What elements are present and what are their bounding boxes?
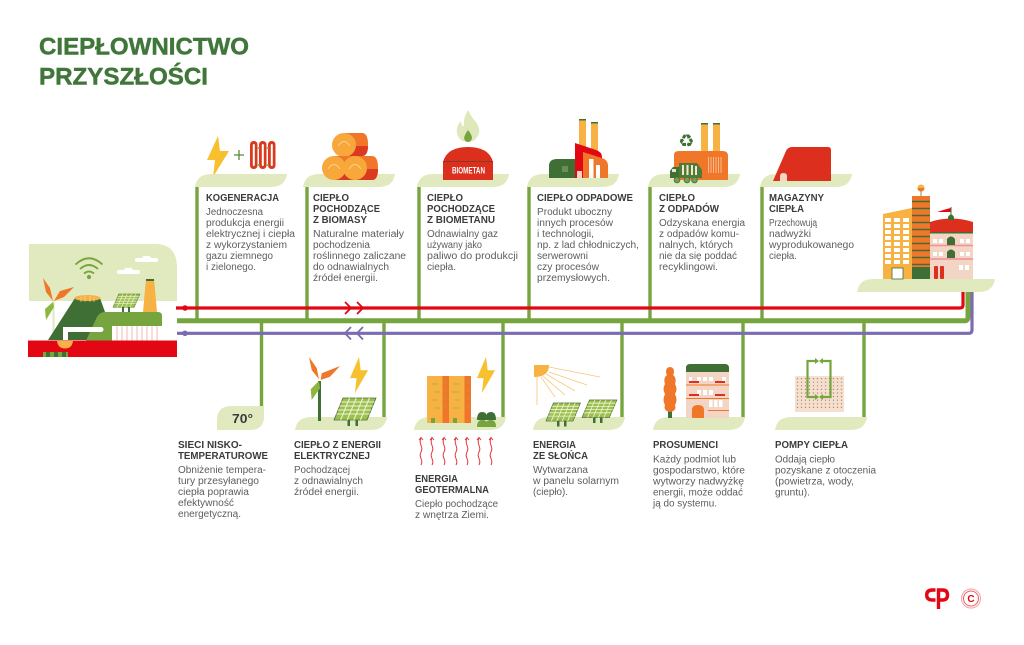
panel: pompy ciepła: POMPY CIEPŁA	[775, 440, 848, 451]
panel: sieci niskotemperaturowe: SIECI NISKO-	[178, 440, 242, 451]
panel: energia geotermalna: GEOTERMALNA	[415, 485, 489, 496]
icon: waste plant: ♻	[678, 131, 695, 152]
panel: ciepło odpadowe: serwerowni	[537, 251, 588, 262]
panel: biomasa: roślinnego zaliczane	[313, 251, 406, 262]
panel: prosumenci: PROSUMENCI	[653, 440, 718, 451]
panel: biomasa: pochodzenia	[313, 240, 370, 251]
panel: energia geotermalna	[414, 357, 506, 521]
panel: prosumenci: gospodarstwo, które	[653, 466, 745, 476]
panel: ciepło z odpadów: Z ODPADÓW	[659, 202, 720, 215]
panel: ciepło odpadowe: Produkt uboczny	[537, 207, 612, 218]
network pipelines	[176, 187, 972, 418]
panel: biomasa: do odnawialnych	[313, 262, 389, 273]
panel: magazyny ciepła: Przechowują	[769, 218, 817, 229]
icon: radiator	[250, 141, 276, 169]
panel: biomasa: Naturalne materiały	[313, 229, 404, 240]
panel: pompy ciepła	[775, 358, 876, 498]
panel: energia ze słońca: ENERGIA	[533, 440, 576, 451]
panel: pompy ciepła: pozyskane z otoczenia	[775, 466, 876, 476]
panel: biometan: paliwo do produkcji	[427, 251, 518, 262]
illustration: heat plant	[28, 244, 177, 357]
panel: sieci niskotemperaturowe: 70°	[232, 412, 253, 426]
icon: wind turbine	[309, 357, 340, 421]
panel: kogeneracja	[195, 136, 295, 273]
panel: ciepło odpadowe	[527, 119, 639, 284]
panel: magazyny ciepła	[760, 147, 854, 262]
panel: sieci niskotemperaturowe: TEMPERATUROWE	[178, 451, 268, 462]
icon: geothermal block	[427, 376, 471, 423]
panel: prosumenci: Każdy podmiot lub	[653, 454, 736, 466]
illustration: city buildings	[857, 184, 995, 292]
icon: flame	[457, 110, 479, 142]
panel: energia geotermalna: ENERGIA	[415, 474, 458, 485]
panel: prosumenci: ją do systemu.	[652, 498, 717, 510]
panel: kogeneracja: Jednoczesna	[206, 207, 263, 218]
panel: sieci niskotemperaturowe: Obniżenie tempera-	[178, 465, 266, 476]
panel: sieci niskotemperaturowe: efektywność	[178, 498, 234, 509]
panel: biomasa: CIEPŁO	[313, 193, 349, 204]
panel: sieci niskotemperaturowe: ciepła poprawia	[178, 487, 249, 498]
panel: ciepło z odpadów	[648, 123, 745, 273]
panel: ciepło z odpadów: nie da się poddać	[659, 251, 737, 262]
panel: sieci niskotemperaturowe: energetyczną.	[178, 509, 241, 520]
logo: cp	[927, 590, 948, 609]
logo: certificate circle	[962, 589, 980, 608]
panel: ciepło z odpadów: Odzyskana energia	[659, 218, 745, 229]
panel: sieci niskotemperaturowe: tury przesyłanego	[178, 476, 259, 487]
panel: energia ze słońca	[532, 365, 625, 498]
panel: prosumenci	[652, 364, 745, 510]
panel: ciepło z odpadów: recyklingowi.	[659, 262, 718, 273]
icon: sun with rays	[534, 365, 600, 405]
panel: ciepło odpadowe: CIEPŁO ODPADOWE	[537, 193, 633, 204]
panel: ciepło z odpadów: z odpadów komu-	[659, 229, 739, 240]
panel: kogeneracja: elektrycznej i ciepła	[206, 229, 295, 240]
title	[39, 34, 249, 90]
panel: sieci niskotemperaturowe	[178, 406, 268, 520]
panel: biomasa: POCHODZĄCE	[313, 204, 380, 215]
panel: pompy ciepła: Oddają ciepło	[775, 454, 835, 466]
panel: ciepło z energii elektrycznej: źródeł energii.	[294, 487, 359, 498]
panel: biometan: ciepła.	[427, 262, 456, 273]
panel: pompy ciepła: (powietrza, wody,	[775, 476, 854, 488]
panel: ciepło odpadowe: przemysłowych.	[537, 273, 610, 284]
panel: biometan: CIEPŁO	[427, 193, 463, 204]
panel: energia ze słońca: (ciepło).	[533, 487, 568, 498]
panel: prosumenci: energii, może oddać	[653, 488, 743, 498]
icon: heat storage	[773, 147, 831, 181]
icon: industrial plant	[549, 119, 608, 178]
panel: kogeneracja: KOGENERACJA	[206, 193, 279, 204]
panel: biomasa	[303, 133, 406, 284]
panel: energia ze słońca: w panelu solarnym	[532, 476, 619, 487]
logo: certificate circle: C	[967, 594, 975, 605]
panel: biometan: POCHODZĄCE	[427, 204, 495, 215]
icon: biomethane tank	[443, 147, 493, 180]
title: CIEPŁOWNICTWO	[39, 34, 249, 60]
panel: energia ze słońca: Wytwarzana	[533, 465, 588, 476]
title: PRZYSZŁOŚCI	[39, 62, 208, 90]
panel: magazyny ciepła: MAGAZYNY	[769, 193, 824, 204]
panel: biometan: używany jako	[427, 240, 482, 251]
panel: magazyny ciepła: CIEPŁA	[769, 204, 804, 215]
panel: ciepło odpadowe: np. z lad chłodniczych,	[537, 240, 639, 251]
icon: tree	[664, 367, 676, 418]
panel: biometan: Odnawialny gaz	[427, 229, 498, 240]
icon: rising heat waves	[419, 438, 493, 465]
panel: ciepło z energii elektrycznej	[294, 357, 387, 498]
panel: magazyny ciepła: nadwyżki	[769, 229, 811, 240]
panel: magazyny ciepła: wyprodukowanego	[768, 240, 854, 251]
icon: prosumer house	[686, 364, 729, 418]
panel: pompy ciepła: gruntu).	[775, 488, 810, 498]
panel: biomasa: źródeł energii.	[313, 273, 378, 284]
panel: biometan: Z BIOMETANU	[427, 215, 495, 226]
panel: ciepło odpadowe: czy procesów	[537, 262, 600, 273]
panel: energia geotermalna: Ciepło pochodzące	[415, 499, 498, 510]
panel: ciepło z odpadów: nalnych, których	[659, 240, 733, 251]
panel: ciepło z energii elektrycznej: ELEKTRYCZNEJ	[294, 451, 370, 462]
panel: ciepło z energii elektrycznej: Pochodzącej	[294, 465, 350, 476]
icon: heat pump	[795, 358, 844, 412]
panel: kogeneracja: z wykorzystaniem	[206, 240, 287, 251]
panel: kogeneracja: produkcja energii	[206, 218, 284, 229]
icon: biomethane tank: BIOMETAN	[452, 166, 485, 176]
panel: biometan	[417, 110, 518, 273]
panel: ciepło odpadowe: innych procesów	[537, 218, 614, 229]
panel: ciepło z energii elektrycznej: z odnawialnych	[294, 476, 363, 487]
panel: biomasa: Z BIOMASY	[313, 215, 367, 226]
panel: ciepło z odpadów: CIEPŁO	[659, 193, 695, 204]
panel: kogeneracja: gazu ziemnego	[206, 251, 273, 262]
icon: wifi	[76, 258, 102, 278]
panel: magazyny ciepła: ciepła.	[769, 251, 797, 262]
icon: waste plant	[670, 123, 728, 183]
panel: energia geotermalna: z wnętrza Ziemi.	[415, 510, 489, 521]
icon: garbage truck	[670, 163, 702, 183]
panel: kogeneracja: i zielonego.	[206, 262, 256, 273]
panel: ciepło z energii elektrycznej: CIEPŁO Z ENERGII	[294, 440, 381, 451]
panel: prosumenci: wytworzy nadwyżkę	[652, 476, 744, 488]
panel: energia ze słońca: ZE SŁOŃCA	[533, 449, 588, 462]
panel: ciepło odpadowe: i technologii,	[537, 229, 594, 240]
icon: biomass logs	[322, 133, 378, 180]
